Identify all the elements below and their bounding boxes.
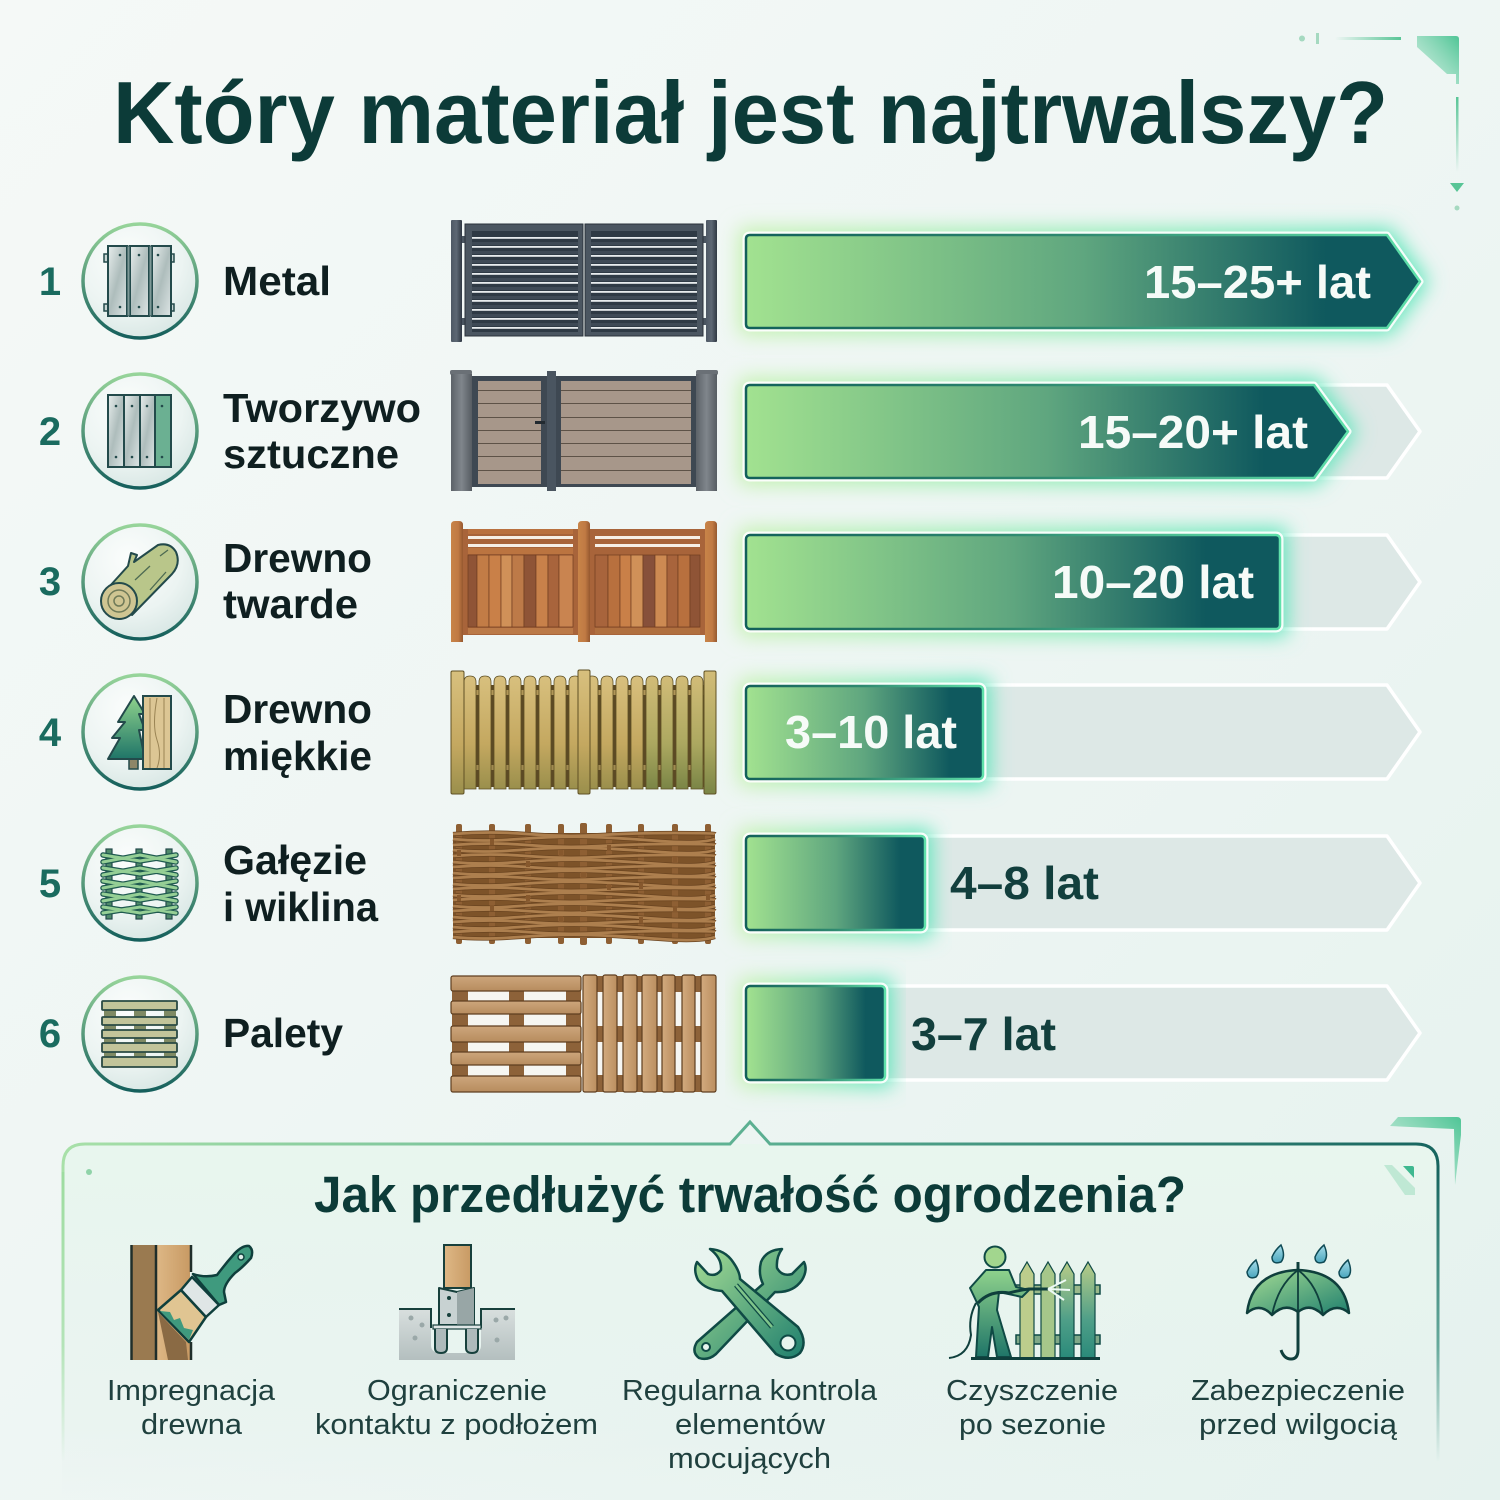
bar: 15–20+ lat <box>746 385 1420 478</box>
bar: 10–20 lat <box>746 535 1420 629</box>
caption: Regularna kontrola <box>622 1375 878 1407</box>
fence photo: metal gate <box>451 220 717 342</box>
label line 2: sztuczne <box>223 431 399 477</box>
tip 1: impregnation <box>107 1245 276 1441</box>
caption: Ograniczenie <box>367 1375 547 1407</box>
rank 2: 2 <box>39 410 61 454</box>
value: 4–8 lat <box>950 857 1099 909</box>
label: Metal <box>223 258 331 304</box>
bar: 3–10 lat <box>746 685 1420 779</box>
rank 6: 6 <box>39 1012 61 1056</box>
value: 15–20+ lat <box>1078 406 1308 458</box>
decoration: top right corner <box>1299 33 1464 210</box>
bar: 15–25+ lat <box>746 235 1420 328</box>
rank 5: 5 <box>39 862 61 906</box>
label line 2: twarde <box>223 581 358 627</box>
rank 4: 4 <box>39 711 62 755</box>
tip 4: seasonal cleaning <box>946 1246 1118 1441</box>
value: 3–10 lat <box>785 706 957 758</box>
row 5: Gałęzie i wiklina <box>39 823 1420 945</box>
row 1: Metal <box>39 220 1420 342</box>
fence photo: wicker <box>453 823 715 945</box>
fence photo: composite gate <box>450 370 718 491</box>
caption line 2: drewna <box>141 1409 243 1441</box>
row 3: Drewno twarde <box>39 521 1420 642</box>
fence photo: hardwood <box>451 521 717 642</box>
row 2: Tworzywo sztuczne <box>39 370 1420 491</box>
bar: 4–8 lat <box>746 836 1420 930</box>
label: Drewno <box>223 686 372 732</box>
icon: pallet <box>83 977 197 1091</box>
value: 10–20 lat <box>1052 556 1254 608</box>
tip 3: regular inspection <box>622 1249 878 1475</box>
caption line 2: elementów <box>675 1409 826 1441</box>
fence photo: softwood pickets <box>451 670 716 794</box>
caption line 3: mocujących <box>668 1443 831 1475</box>
value: 3–7 lat <box>911 1008 1056 1060</box>
panel heading: Jak przedłużyć trwałość ogrodzenia? <box>314 1166 1186 1223</box>
rank 3: 3 <box>39 560 61 604</box>
caption: Czyszczenie <box>946 1375 1118 1407</box>
row 4: Drewno miękkie <box>39 670 1420 794</box>
value: 15–25+ lat <box>1144 256 1371 308</box>
panel: how to extend fence life <box>62 1117 1461 1500</box>
icon: metal panels <box>83 224 197 338</box>
caption line 2: po sezonie <box>959 1409 1106 1441</box>
row 6: Palety <box>39 975 1420 1092</box>
label: Tworzywo <box>223 385 421 431</box>
tip 2: limit ground contact <box>315 1245 598 1441</box>
icon: crossed wrenches <box>694 1249 806 1359</box>
icon: tree and plank <box>83 675 197 789</box>
caption line 2: przed wilgocią <box>1199 1409 1398 1441</box>
icon: paint brush on post <box>131 1245 252 1360</box>
label line 2: i wiklina <box>223 884 379 930</box>
title: Który materiał jest najtrwalszy? <box>113 63 1388 162</box>
fence photo: pallets <box>451 975 716 1092</box>
icon: umbrella with rain <box>1247 1245 1350 1359</box>
label: Drewno <box>223 535 372 581</box>
icon: plastic boards <box>83 374 197 488</box>
icon: wicker weave <box>83 826 197 940</box>
label: Palety <box>223 1010 343 1056</box>
label line 2: miękkie <box>223 733 372 779</box>
caption line 2: kontaktu z podłożem <box>315 1409 598 1441</box>
rank 1: 1 <box>39 260 61 304</box>
icon: log <box>83 525 197 639</box>
icon: person washing fence <box>949 1246 1100 1360</box>
bar: 3–7 lat <box>746 986 1420 1080</box>
icon: post anchor in concrete <box>399 1245 515 1360</box>
tip 5: moisture protection <box>1191 1245 1405 1441</box>
label: Gałęzie <box>223 837 367 883</box>
caption: Zabezpieczenie <box>1191 1375 1405 1407</box>
caption: Impregnacja <box>107 1375 276 1407</box>
